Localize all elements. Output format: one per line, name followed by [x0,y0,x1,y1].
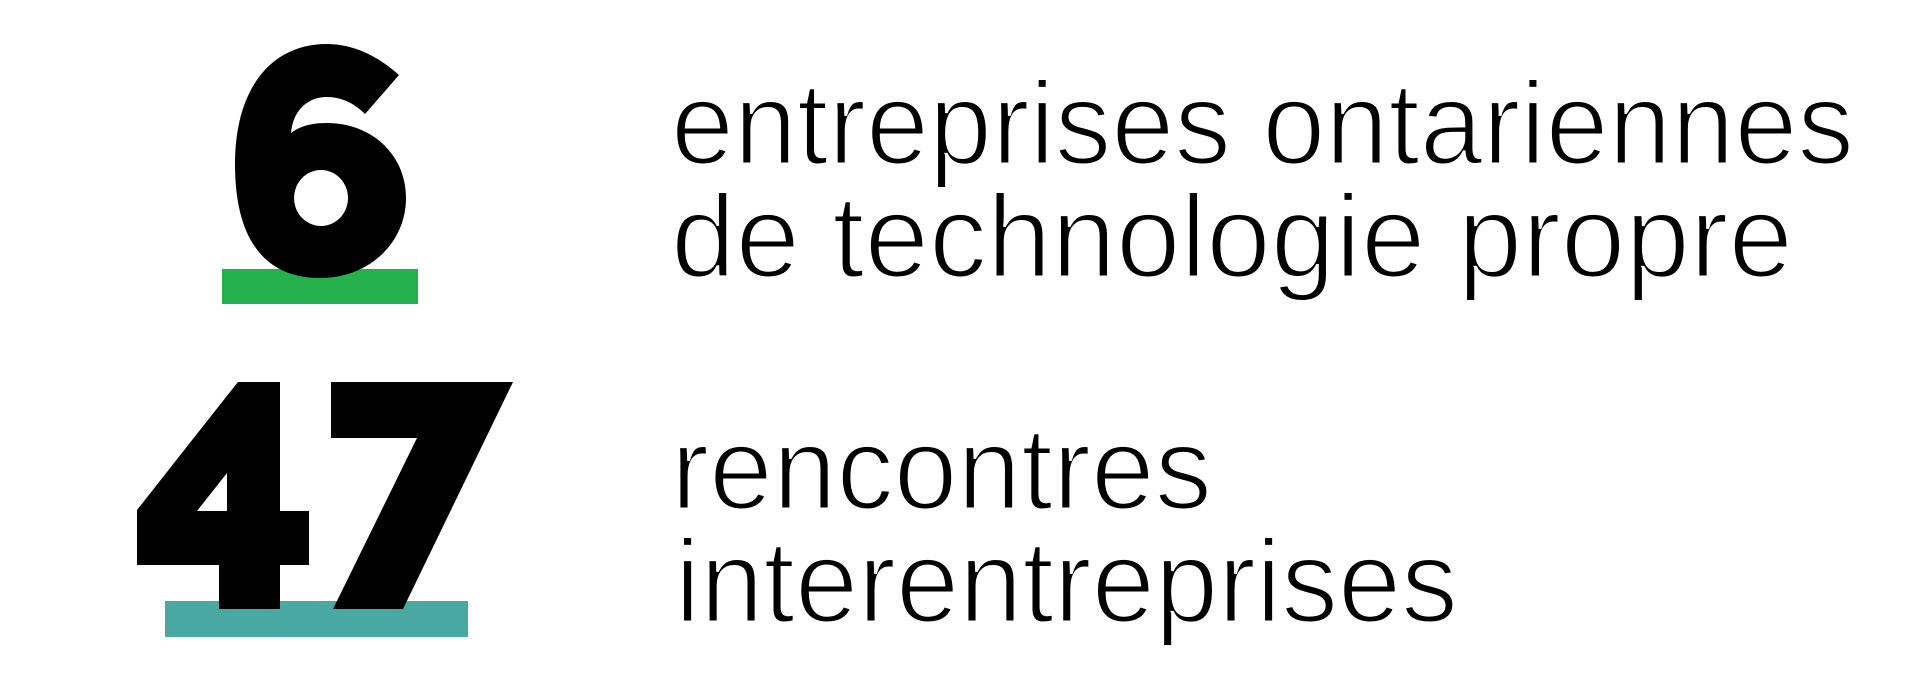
panel: statistic 47 meetings [137,382,1452,645]
number 47: 4 [129,327,317,678]
teal underline bar [165,601,468,637]
number 47: 7 [291,326,511,677]
number 47 [137,382,513,609]
label: rencontres interentreprises: rencontres [671,403,1212,535]
number 6: 6 [220,0,418,343]
label: entreprises ontariennes de technologie propre: de technologie propre [671,171,1793,303]
label: rencontres interentreprises [671,403,1458,648]
label: entreprises ontariennes de technologie propre [671,58,1854,303]
label: rencontres interentreprises: interentreprises [675,516,1458,648]
green underline bar [222,269,418,304]
label: entreprises ontariennes de technologie propre: entreprises ontariennes [671,58,1854,190]
panel: statistic 6 companies [222,44,1848,304]
